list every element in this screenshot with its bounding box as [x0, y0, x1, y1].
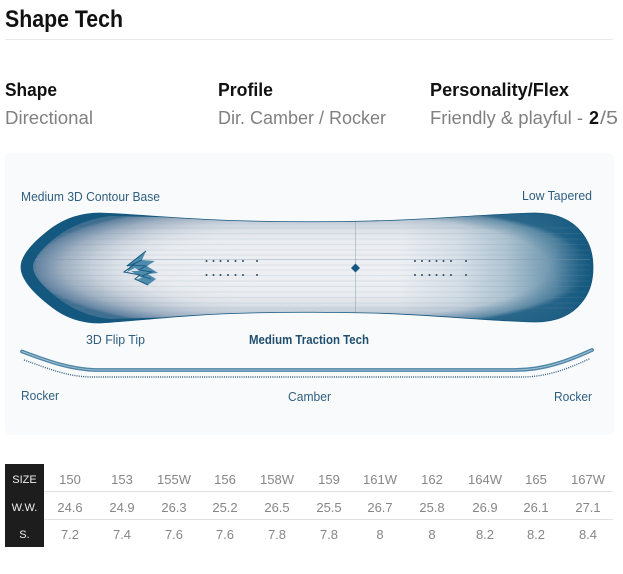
title: Shape Tech	[5, 6, 123, 33]
center marker	[351, 264, 360, 272]
spec column: shape: Shape	[5, 80, 57, 100]
row: waist width: 26.1	[523, 500, 549, 515]
row: waist width: 26.7	[367, 500, 393, 515]
row: size: 161W	[363, 472, 398, 487]
row: size: 150	[59, 472, 81, 487]
spec column: shape	[5, 80, 93, 128]
spec column: profile: Dir. Camber / Rocker	[218, 108, 386, 128]
row: size	[59, 472, 606, 487]
row: size: 156	[214, 472, 236, 487]
row: waist width	[57, 500, 601, 515]
tail insert dots	[206, 260, 258, 276]
row: setback: 7.8	[320, 527, 338, 542]
table row headers: S.	[19, 529, 30, 541]
row: waist width: 26.3	[161, 500, 187, 515]
table row headers: W.W.	[12, 502, 37, 514]
row: setback: 7.8	[268, 527, 286, 542]
spec column: profile	[218, 80, 386, 128]
snowboard top view	[20, 212, 594, 324]
row: size: 164W	[468, 472, 503, 487]
row: setback: 7.2	[61, 527, 79, 542]
rocker camber dotted line	[24, 358, 590, 377]
row: size: 167W	[571, 472, 606, 487]
spec column: shape: Directional	[5, 108, 93, 128]
row: waist width: 25.5	[316, 500, 342, 515]
row: setback: 8	[376, 527, 384, 542]
row: size: 165	[525, 472, 547, 487]
row: waist width: 26.5	[264, 500, 290, 515]
row: size: 155W	[157, 472, 192, 487]
label: 3D flip tip: 3D Flip Tip	[86, 333, 145, 347]
nose insert dots	[414, 260, 467, 276]
row: size: 158W	[260, 472, 295, 487]
row: setback: 8	[428, 527, 436, 542]
spec column: personality and flex: Personality/Flex	[430, 80, 569, 100]
label: low tapered: Low Tapered	[522, 189, 592, 203]
row: waist width: 24.6	[57, 500, 83, 515]
spec column: personality and flex: 2	[589, 108, 599, 128]
row: setback: 8.4	[579, 527, 597, 542]
panel: board diagram	[20, 190, 594, 401]
spec column: personality and flex: Friendly & playful -	[430, 108, 583, 128]
table row headers	[12, 474, 37, 541]
icon: zigzag logo	[124, 251, 158, 285]
row: setback: 7.6	[216, 527, 234, 542]
row: waist width: 25.2	[212, 500, 238, 515]
row: setback	[61, 527, 597, 542]
label: rocker right: Rocker	[554, 390, 592, 404]
label: camber: Camber	[288, 390, 331, 404]
row: setback: 7.4	[113, 527, 131, 542]
row: setback: 7.6	[165, 527, 183, 542]
row: size: 159	[318, 472, 340, 487]
table row headers: SIZE	[12, 474, 37, 486]
spec column: personality and flex: /5	[600, 108, 618, 128]
row: setback: 8.2	[476, 527, 494, 542]
spec column: profile: Profile	[218, 80, 273, 100]
size table	[5, 464, 613, 547]
label: rocker left: Rocker	[21, 389, 59, 403]
label: medium traction tech: Medium Traction Tech	[249, 333, 369, 347]
row: setback: 8.2	[527, 527, 545, 542]
board side profile	[22, 350, 592, 377]
row: size: 153	[111, 472, 133, 487]
spec column: personality and flex	[430, 80, 618, 128]
label: medium 3D contour base: Medium 3D Contour Base	[21, 190, 160, 204]
row: waist width: 26.9	[472, 500, 498, 515]
row: waist width: 24.9	[109, 500, 135, 515]
row: size: 162	[421, 472, 443, 487]
row: waist width: 25.8	[419, 500, 445, 515]
row: waist width: 27.1	[575, 500, 601, 515]
